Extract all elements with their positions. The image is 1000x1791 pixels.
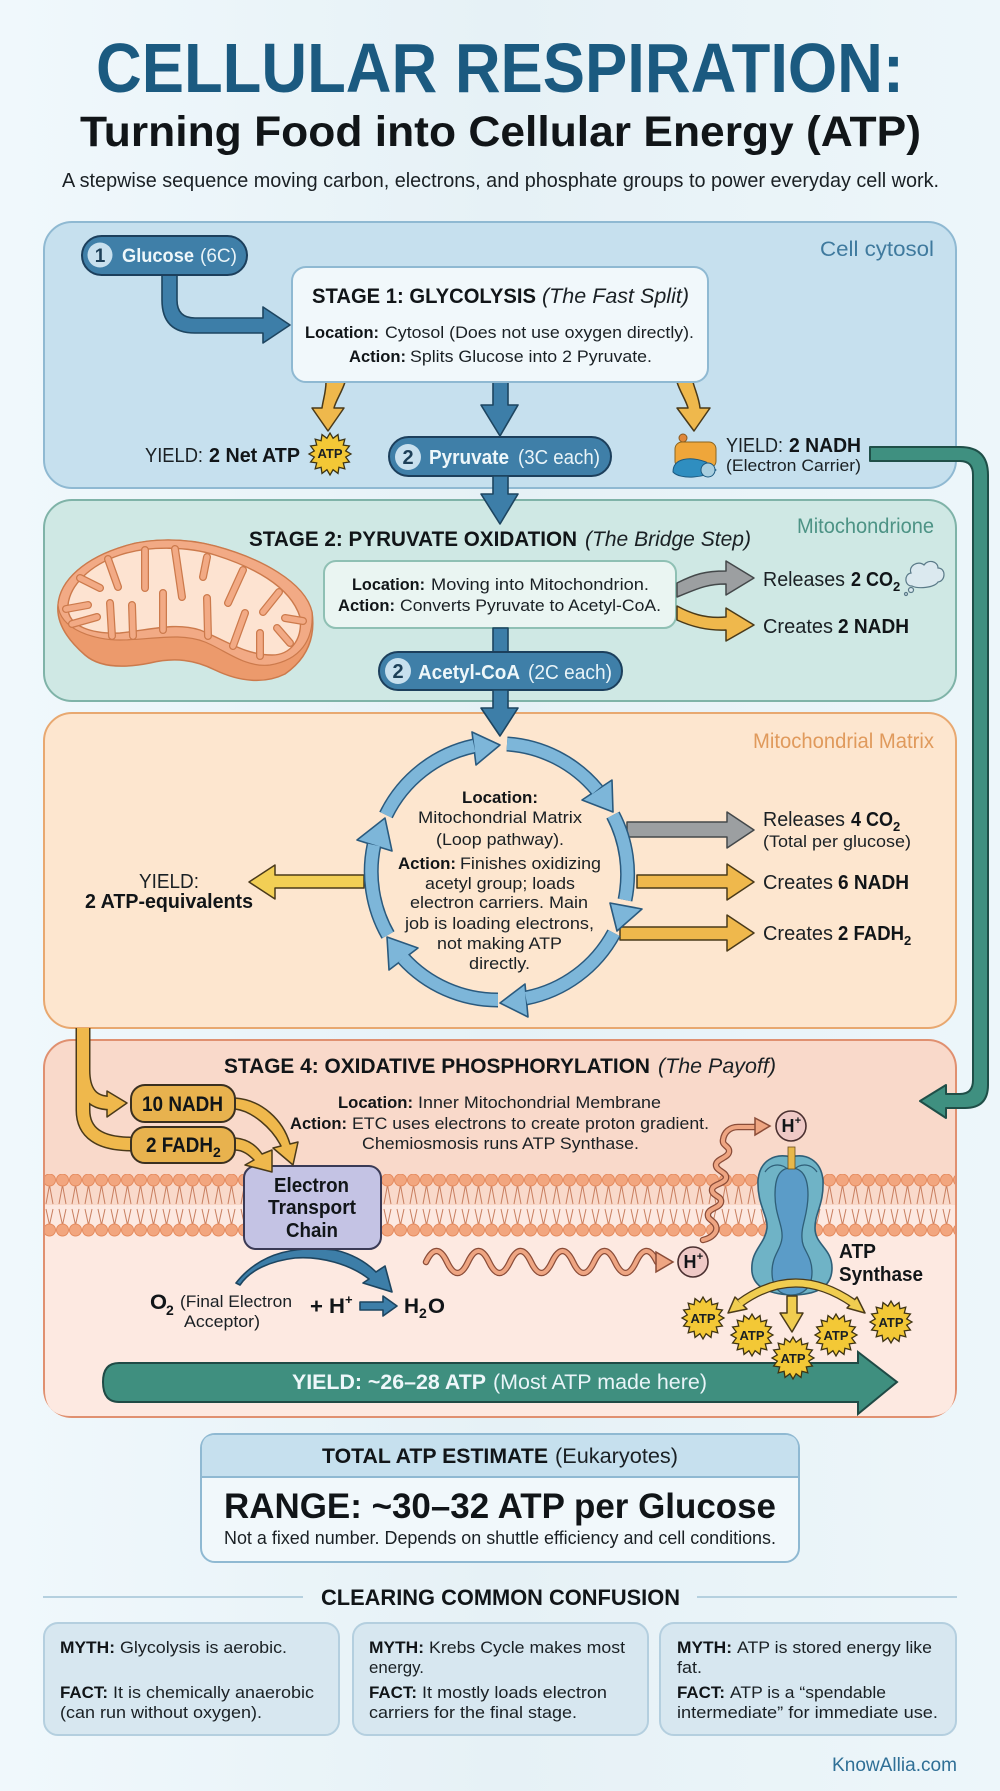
pill: glucose — [82, 236, 247, 275]
label: atp synthase: Synthase — [839, 1264, 923, 1286]
panel: total atp estimate — [201, 1434, 799, 1562]
yield: 2 atp-equivalents: 2 ATP-equivalents — [85, 891, 253, 913]
yield: 2 nadh — [726, 435, 861, 475]
label: releases 4 co2: Releases — [763, 809, 845, 831]
yield: 2 atp-equivalents — [85, 871, 253, 913]
equation: water formation: 2 — [166, 1302, 174, 1318]
cycle description — [398, 788, 601, 973]
stage 1 card: Action: — [349, 347, 406, 366]
card: myth krebs: It mostly loads electron — [422, 1683, 607, 1702]
pill: 10 nadh: 10 NADH — [142, 1093, 223, 1116]
pill: glucose: Glucose — [122, 246, 194, 267]
arrow: glucose to glycolysis — [162, 275, 290, 343]
atp molecule bursts: ATP — [780, 1351, 806, 1366]
label: releases 2 co2: 2 CO — [851, 569, 893, 591]
yield: 2 nadh: YIELD: — [726, 435, 783, 457]
card: myth atp — [660, 1623, 956, 1735]
arrow: creates 6 nadh — [637, 864, 754, 900]
pill: pyruvate — [389, 437, 611, 476]
atp synthase — [752, 1147, 832, 1295]
label: releases 4 co2 — [763, 809, 911, 851]
stage 1 card: Location: — [305, 323, 379, 342]
icon: electron carrier — [673, 434, 716, 477]
card: myth glycolysis — [44, 1623, 339, 1735]
cycle description: not making ATP — [437, 934, 562, 953]
stage 4 description: Action: — [290, 1114, 347, 1133]
electron transport chain: Electron — [274, 1175, 349, 1197]
cycle description: Location: — [462, 788, 538, 807]
krebs cycle loop arrows — [357, 732, 642, 1017]
label: creates 2 fadh2: 2 FADH — [838, 923, 904, 945]
pill: pyruvate: (3C each) — [518, 447, 600, 469]
stage 2 text box: Action: — [338, 596, 395, 615]
yield: 2 nadh: 2 NADH — [789, 435, 861, 457]
stage 4 heading: (The Payoff) — [658, 1055, 776, 1078]
tagline: A stepwise sequence moving carbon, electrons, and phosphate groups to power everyday cell work. — [62, 170, 939, 192]
panel: total atp estimate: Not a fixed number. Depends on shuttle efficiency and cell conditions. — [224, 1528, 776, 1548]
equation: water formation: O — [428, 1295, 445, 1318]
equation: water formation: Acceptor) — [184, 1312, 260, 1331]
electron transport chain: Transport — [268, 1197, 356, 1219]
stage 2 text box: Location: — [352, 575, 425, 594]
label: atp synthase — [839, 1241, 923, 1286]
atp molecule bursts: ATP — [878, 1315, 904, 1330]
footer: source: KnowAllia.com — [832, 1755, 957, 1776]
label: creates 2 nadh: Creates — [763, 616, 833, 638]
atp molecule bursts: ATP — [824, 1328, 849, 1343]
card: myth atp: ATP is stored energy like — [737, 1638, 932, 1657]
stage 2 text box — [324, 561, 676, 628]
label: creates 2 nadh — [763, 616, 909, 638]
pill: acetyl-coa: Acetyl-CoA — [418, 662, 520, 684]
yield: 2 net atp — [145, 433, 351, 475]
proton upper: H — [782, 1116, 794, 1136]
card: myth glycolysis: FACT: — [60, 1683, 108, 1702]
yield: 2 net atp: ATP — [318, 446, 343, 461]
equation: water formation: + — [345, 1292, 353, 1307]
pill: 2 fadh2: 2 FADH — [146, 1134, 213, 1157]
panel: total atp estimate: RANGE: ~30–32 ATP per Glucose — [224, 1487, 776, 1526]
arrow: pyruvate stage to acetyl — [493, 628, 508, 652]
equation: water formation — [150, 1291, 445, 1331]
label: releases 4 co2: 2 — [893, 819, 900, 834]
stage 4 description — [290, 1093, 709, 1153]
label: releases 2 co2 — [763, 569, 900, 594]
label: releases 2 co2: 2 — [893, 579, 900, 594]
panel: stage 1 glycolysis — [44, 222, 956, 488]
arrow: yield 26-28 atp — [103, 1352, 897, 1414]
yield: 2 net atp: YIELD: — [145, 445, 203, 467]
card: myth krebs — [353, 1623, 648, 1735]
label: creates 2 fadh2 — [763, 923, 911, 948]
stage 1 card — [292, 267, 708, 382]
wavy proton arrow horizontal — [426, 1251, 673, 1273]
arrow: releases 4 co2 — [627, 812, 754, 848]
arrow: yield atp-equivalents — [249, 865, 364, 899]
panel: stage 2 pyruvate oxidation — [44, 500, 956, 701]
stage 1 card: (The Fast Split) — [542, 285, 689, 308]
pill: 10 nadh — [131, 1085, 235, 1122]
arrow: yield nadh — [677, 382, 710, 431]
arrow: pyruvate to stage 2 — [481, 476, 518, 524]
stage 2 heading: (The Bridge Step) — [585, 528, 751, 551]
stage 1 card: Splits Glucose into 2 Pyruvate. — [410, 347, 652, 366]
label: releases 4 co2: 4 CO — [851, 809, 893, 831]
pill: acetyl-coa — [379, 652, 622, 690]
arrow: electrons to water — [236, 1249, 392, 1292]
panel: total atp estimate: TOTAL ATP ESTIMATE — [322, 1445, 548, 1468]
stage 4 description: Inner Mitochondrial Membrane — [418, 1093, 661, 1112]
stage 4 description: Location: — [338, 1093, 413, 1112]
proton upper: + — [795, 1115, 801, 1127]
card: myth glycolysis: MYTH: — [60, 1638, 115, 1657]
arrow: releases co2 — [677, 561, 754, 597]
card: myth glycolysis: It is chemically anaerobic — [113, 1683, 315, 1702]
equation: water formation: (Final Electron — [180, 1292, 292, 1311]
card: myth krebs: FACT: — [369, 1683, 417, 1702]
panel: stage 4 oxidative phosphorylation — [44, 1040, 956, 1417]
equation: water formation: H — [404, 1295, 419, 1318]
card: myth krebs: MYTH: — [369, 1638, 424, 1657]
card: myth krebs: carriers for the final stage. — [369, 1703, 577, 1722]
proton lower — [678, 1247, 708, 1277]
pill: acetyl-coa: (2C each) — [528, 662, 612, 684]
label: releases 4 co2: (Total per glucose) — [763, 832, 911, 851]
stage 2 heading — [249, 528, 751, 551]
stage 2 text box: Moving into Mitochondrion. — [431, 575, 649, 594]
yield: 2 net atp: 2 Net ATP — [209, 445, 300, 467]
wavy proton arrow vertical — [703, 1118, 770, 1240]
pill: pyruvate: Pyruvate — [429, 447, 509, 469]
label: creates 6 nadh: Creates — [763, 872, 833, 894]
label: creates 2 fadh2: 2 — [904, 933, 911, 948]
subtitle: Turning Food into Cellular Energy (ATP) — [80, 108, 921, 156]
arrow: yield 26-28 atp: YIELD: ~26–28 ATP — [292, 1371, 486, 1394]
arrow: nadh to etc — [235, 1098, 298, 1165]
label: creates 2 nadh: 2 NADH — [838, 616, 909, 638]
arrow: yield 26-28 atp: (Most ATP made here) — [493, 1371, 707, 1394]
heading: clearing common confusion: CLEARING COMMON CONFUSION — [321, 1585, 680, 1610]
card: myth krebs: energy. — [369, 1658, 424, 1677]
equation: water formation: O — [150, 1291, 167, 1314]
card: myth glycolysis: Glycolysis is aerobic. — [120, 1638, 287, 1657]
label: atp synthase: ATP — [839, 1241, 876, 1263]
equation: water formation: + H — [310, 1295, 345, 1318]
stage 4 heading: STAGE 4: OXIDATIVE PHOSPHORYLATION — [224, 1055, 650, 1078]
arrow: glycolysis to pyruvate — [481, 382, 518, 436]
pill: glucose: 1 — [95, 246, 106, 267]
arrow: creates 2 fadh2 — [620, 915, 754, 951]
arrow: acetyl-coa to cycle — [481, 690, 518, 736]
label: releases 2 co2: Releases — [763, 569, 845, 591]
region label: mitochondrion: Mitochondrione — [797, 515, 934, 538]
arrow: carriers from cycle to stage 4 — [83, 1028, 132, 1144]
card: myth glycolysis: (can run without oxygen). — [60, 1703, 262, 1722]
pill: acetyl-coa: 2 — [392, 661, 404, 683]
arrow: creates nadh — [677, 606, 754, 641]
equation: water formation: 2 — [419, 1305, 427, 1321]
card: myth atp: MYTH: — [677, 1638, 732, 1657]
stage 1 card: Cytosol (Does not use oxygen directly). — [385, 323, 694, 342]
illustration: mitochondrion — [58, 540, 313, 680]
atp molecule bursts: ATP — [690, 1311, 716, 1326]
region label: cell cytosol: Cell cytosol — [820, 238, 934, 261]
atp molecule bursts: ATP — [740, 1328, 765, 1343]
cycle description: directly. — [469, 954, 530, 973]
panel: total atp estimate: (Eukaryotes) — [555, 1445, 678, 1468]
cycle description: acetyl group; loads — [425, 874, 575, 893]
proton lower: + — [697, 1251, 703, 1263]
arrow: fadh2 to etc — [235, 1138, 272, 1172]
yield: 2 nadh: (Electron Carrier) — [726, 456, 861, 475]
label: creates 2 fadh2: Creates — [763, 923, 833, 945]
cycle description: Mitochondrial Matrix — [418, 808, 583, 827]
lower matrix background — [45, 1205, 955, 1416]
atp molecule bursts — [682, 1297, 912, 1379]
pill: glucose: (6C) — [200, 246, 237, 267]
label: creates 6 nadh: 6 NADH — [838, 872, 909, 894]
yield: 2 atp-equivalents: YIELD: — [139, 871, 199, 893]
pill: pyruvate: 2 — [402, 447, 414, 469]
panel: stage 3 krebs cycle — [44, 713, 956, 1028]
icon: co2 cloud — [904, 561, 944, 596]
electron transport chain: Chain — [286, 1220, 338, 1242]
card: myth krebs: Krebs Cycle makes most — [429, 1638, 625, 1657]
cycle description: Finishes oxidizing — [460, 854, 601, 873]
region label: mitochondrial matrix: Mitochondrial Matrix — [753, 730, 934, 753]
arrows: atp output — [728, 1283, 865, 1332]
title: CELLULAR RESPIRATION: — [96, 29, 904, 107]
cycle description: (Loop pathway). — [436, 830, 564, 849]
stage 4 description: Chemiosmosis runs ATP Synthase. — [362, 1134, 639, 1153]
arrow: nadh from glycolysis to stage 4 — [870, 447, 988, 1118]
stage 2 heading: STAGE 2: PYRUVATE OXIDATION — [249, 528, 577, 551]
cycle description: job is loading electrons, — [404, 914, 594, 933]
card: myth atp: FACT: — [677, 1683, 725, 1702]
card: myth atp: ATP is a “spendable — [730, 1683, 886, 1702]
stage 4 description: ETC uses electrons to create proton gradient. — [352, 1114, 709, 1133]
cycle description: Action: — [398, 854, 456, 873]
membrane — [45, 1174, 955, 1237]
stage 1 card: STAGE 1: GLYCOLYSIS — [312, 285, 536, 308]
pill: 2 fadh2: 2 — [213, 1144, 221, 1160]
card: myth atp: fat. — [677, 1658, 702, 1677]
cycle description: electron carriers. Main — [410, 893, 588, 912]
stage 2 text box: Converts Pyruvate to Acetyl-CoA. — [400, 596, 661, 615]
electron transport chain — [244, 1166, 381, 1249]
label: creates 6 nadh — [763, 872, 909, 894]
pill: 2 fadh2 — [131, 1127, 235, 1163]
card: myth atp: intermediate” for immediate use. — [677, 1703, 938, 1722]
proton lower: H — [684, 1252, 696, 1272]
arrow: yield atp — [312, 382, 345, 431]
proton upper — [776, 1111, 806, 1141]
